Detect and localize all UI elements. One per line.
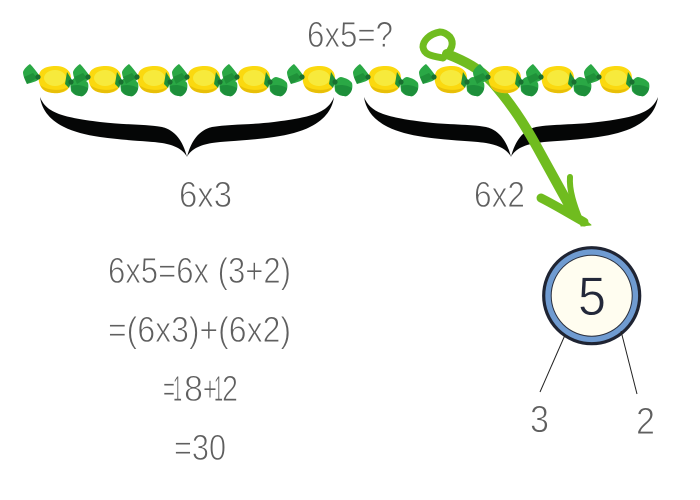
number 5: 5 (578, 265, 606, 327)
step 4: =30 (174, 427, 226, 468)
label: 6x2: 6x2 (474, 174, 525, 215)
title question: 6x5=? (307, 14, 393, 55)
step 1: 6x5=6x (3+2) (108, 250, 291, 291)
connector lines (540, 331, 637, 394)
part: 2: 2 (636, 401, 655, 443)
label: 6x3: 6x3 (179, 174, 232, 215)
part: 3: 3 (530, 399, 549, 441)
row of 11 candies (23, 64, 649, 96)
left brace (40, 97, 334, 157)
arrow: green hand-drawn loop to the circle (423, 32, 591, 226)
step 3: 1 (173, 368, 182, 409)
step 3: 8 (184, 368, 203, 409)
step 3: = (163, 368, 175, 409)
step 3: 2 (222, 368, 238, 409)
step 2: =(6x3)+(6x2) (108, 309, 291, 350)
step 3: 1 (214, 368, 223, 409)
number bond circle (544, 248, 640, 344)
step 3: + (203, 368, 217, 409)
right brace (364, 97, 658, 157)
